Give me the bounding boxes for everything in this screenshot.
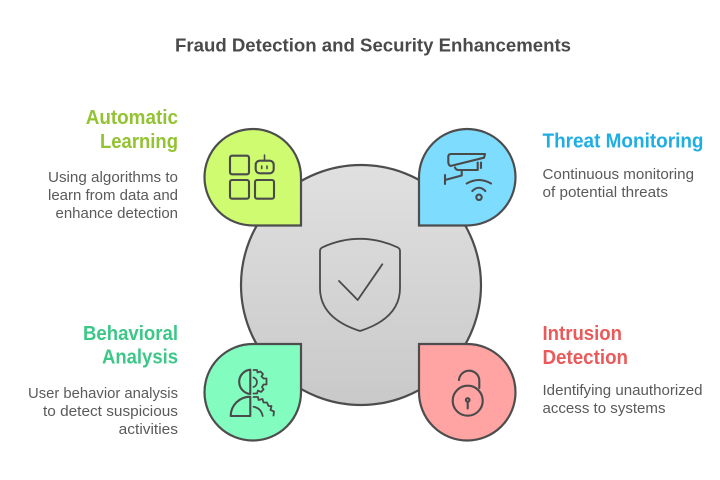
text block: automatic learning: learn from data and (48, 188, 178, 204)
icon: shield with check (320, 239, 400, 331)
text block: threat monitoring: Threat Monitoring (542, 130, 704, 152)
text block: automatic learning: Using algorithms to (48, 170, 178, 186)
text block: behavioral analysis (28, 323, 178, 438)
icon: security camera with wifi (445, 154, 491, 200)
panel: intrusion detection drop (419, 344, 516, 440)
icon: open padlock (453, 371, 483, 416)
panel: threat monitoring drop (419, 129, 516, 226)
text block: automatic learning (48, 107, 178, 222)
text block: automatic learning: enhance detection (56, 206, 178, 222)
icon: head and gears (231, 370, 274, 416)
text block: automatic learning: Learning (100, 131, 178, 153)
panel: automatic learning drop (205, 129, 301, 226)
text block: threat monitoring: of potential threats (542, 185, 668, 201)
text block: behavioral analysis: Analysis (102, 346, 178, 368)
central circle (241, 165, 481, 405)
text block: behavioral analysis: User behavior analysis (28, 386, 178, 402)
text block: threat monitoring (542, 130, 704, 201)
text block: behavioral analysis: Behavioral (83, 323, 178, 345)
text block: behavioral analysis: activities (119, 422, 178, 438)
text block: intrusion detection: access to systems (542, 401, 666, 417)
text block: automatic learning: Automatic (86, 107, 178, 129)
text block: intrusion detection: Detection (542, 347, 628, 369)
text block: intrusion detection: Identifying unauthorized (542, 383, 702, 399)
text block: intrusion detection (542, 323, 702, 417)
panel: behavioral analysis drop (205, 344, 301, 440)
text block: behavioral analysis: to detect suspicious (43, 404, 178, 420)
text block: threat monitoring: Continuous monitoring (542, 167, 694, 183)
icon: grid with robot (230, 155, 274, 199)
title: Fraud Detection and Security Enhancements (175, 34, 571, 56)
text block: intrusion detection: Intrusion (542, 323, 622, 345)
